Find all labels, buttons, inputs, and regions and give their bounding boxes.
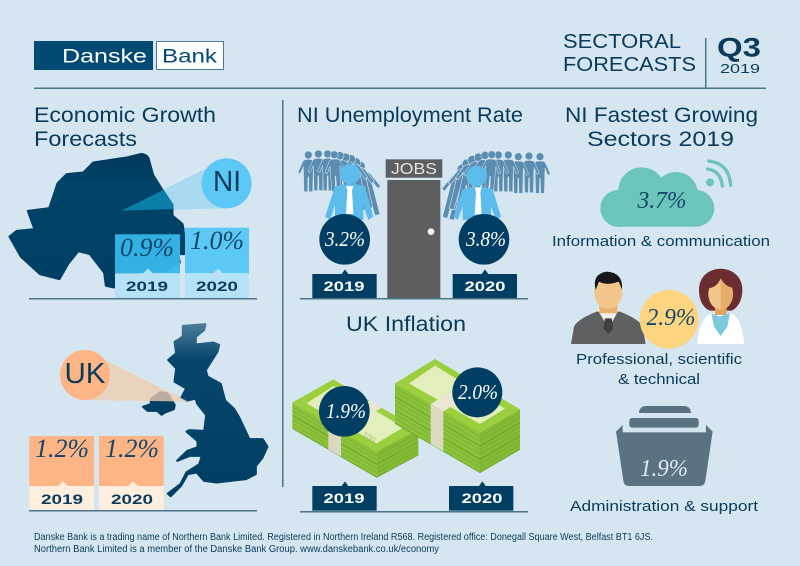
year 2019: 2019 [324, 278, 365, 294]
illustration: door and queues [298, 150, 550, 299]
panel: economic growth UK [29, 324, 267, 512]
logo: Danske Bank [34, 41, 224, 70]
heading: NI Unemployment Rate: NI Unemployment Rate [297, 104, 523, 127]
label: Administration & support: Administration & support [570, 498, 759, 515]
icon: professionals [571, 269, 744, 349]
value 3.7%: 3.7% [637, 188, 686, 214]
circle 3.8% [459, 214, 509, 265]
footer: legal text: Northern Bank Limited is a member of the Danske Bank Group. www.danskebank.co.uk/economy [34, 544, 439, 555]
heading: NI Fastest Growing Sectors 2019 [565, 104, 758, 151]
bar: NI 2019 0.9%: 2019 [126, 278, 168, 294]
header title: Sectoral Forecasts Q3 2019: 2019 [720, 61, 760, 76]
money stack 2019 [292, 379, 418, 477]
bar: UK 2020 1.2%: 1.2% [105, 434, 159, 463]
heading: NI Fastest Growing Sectors 2019: Sectors 2019 [587, 128, 734, 151]
value 2.9%: 2.9% [646, 305, 696, 331]
header title: Sectoral Forecasts Q3 2019: Q3 [717, 32, 761, 62]
year box 2019 [312, 481, 377, 511]
bill mark 100: 100 [361, 430, 378, 445]
map: Northern Ireland [10, 154, 252, 287]
value 3.2%: 3.2% [324, 227, 365, 251]
panel: NI fastest growing sectors [552, 104, 770, 515]
value 3.8%: 3.8% [465, 227, 506, 251]
header title: Sectoral Forecasts Q3 2019: FORECASTS [563, 54, 696, 76]
bar: UK 2019 1.2%: 2019 [41, 491, 83, 507]
circle 2.0% [452, 367, 502, 417]
footer: legal text [34, 532, 653, 555]
heading: UK Inflation: UK Inflation [346, 313, 466, 336]
map: United Kingdom [60, 324, 267, 496]
illustration: money stacks [292, 359, 520, 511]
year 2019: 2019 [324, 490, 365, 506]
label: NI: NI [213, 166, 241, 198]
label: Professional, scientific & technical: & technical [618, 371, 700, 388]
circle 3.2% [319, 214, 370, 265]
heading: Economic Growth Forecasts: Economic Growth [34, 104, 216, 127]
door [386, 159, 442, 299]
value 1.9%: 1.9% [640, 456, 688, 482]
year box 2020 [449, 481, 513, 511]
label: Information & communication: Information & communication [552, 233, 770, 250]
bar: NI 2020 1.0%: 2020 [196, 278, 238, 294]
queue left 2019 [298, 150, 388, 220]
person left 2019 [325, 164, 373, 220]
man [571, 272, 646, 344]
label: Professional, scientific & technical [576, 351, 743, 388]
heading: Economic Growth Forecasts: Forecasts [34, 128, 137, 151]
icon: cloud with wifi [600, 161, 731, 227]
logo: Danske Bank: Bank [162, 46, 218, 68]
year 2020: 2020 [462, 490, 503, 506]
header title: Sectoral Forecasts Q3 2019 [563, 31, 761, 88]
circle 2.9% [640, 290, 698, 349]
bar: UK 2020 1.2% [99, 434, 164, 510]
heading: Economic Growth Forecasts [34, 104, 216, 151]
bar: UK 2019 1.2%: 1.2% [35, 434, 89, 463]
circle 1.9% [319, 386, 370, 437]
bar: NI 2020 1.0% [185, 226, 249, 298]
footer: legal text: Danske Bank is a trading name of Northern Bank Limited. Registered in Northern Ireland R568. Registered office: Donegall Square West, Belfast BT1 6JS. [34, 532, 653, 543]
value 1.9%: 1.9% [326, 399, 366, 423]
panel: economic growth NI [10, 104, 257, 300]
person right 2020 [454, 166, 501, 220]
heading: NI Fastest Growing Sectors 2019: NI Fastest Growing [565, 104, 758, 127]
bar: NI 2019 0.9%: 0.9% [120, 233, 174, 262]
year box 2019 [312, 269, 377, 299]
year box 2020 [453, 269, 517, 299]
label: UK: UK [64, 358, 106, 390]
year 2020: 2020 [464, 278, 506, 294]
panel: UK inflation [292, 313, 528, 512]
money stack 2020 [395, 359, 520, 473]
icon: file drawer [616, 406, 713, 486]
bar: NI 2019 0.9% [115, 233, 180, 298]
woman [697, 269, 744, 344]
value 2.0%: 2.0% [458, 380, 498, 404]
panel: NI unemployment rate [297, 104, 550, 300]
label: Professional, scientific & technical: Professional, scientific [576, 351, 743, 368]
bar: UK 2020 1.2%: 2020 [111, 491, 153, 507]
logo: Danske Bank: Danske [62, 46, 147, 68]
header title: Sectoral Forecasts Q3 2019: SECTORAL [563, 31, 681, 53]
sign: JOBS: JOBS [391, 161, 437, 178]
queue right 2020 [434, 150, 550, 223]
bar: NI 2020 1.0%: 1.0% [190, 226, 244, 255]
bar: UK 2019 1.2% [29, 434, 94, 510]
